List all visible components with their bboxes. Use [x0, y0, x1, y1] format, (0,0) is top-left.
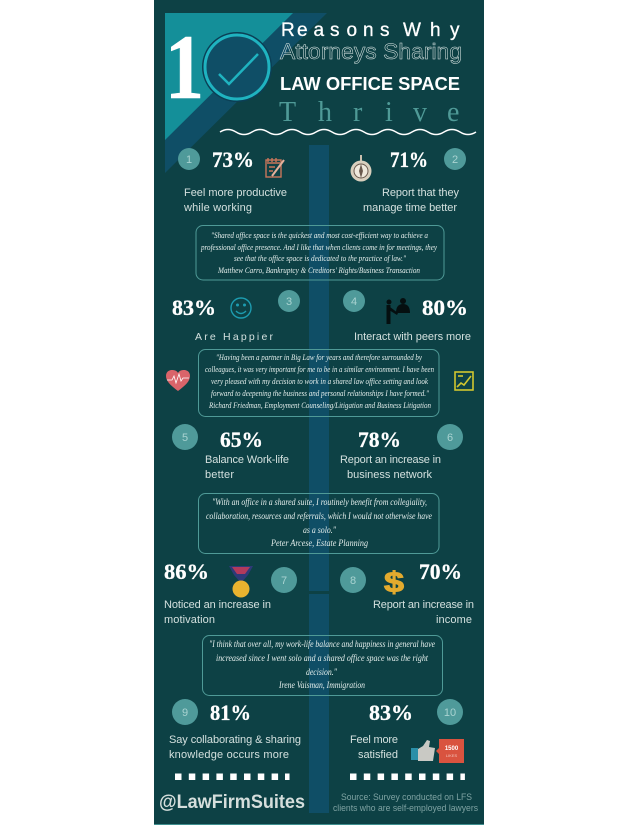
quote 2: [198, 350, 439, 416]
handle: @LawFirmSuites: [159, 792, 305, 813]
stat 8: 70% income: [340, 559, 474, 626]
stat 2: 71% time: 71%: [390, 147, 428, 172]
quote 2: very pleased with my decision to work in a shared law office setting and look: [211, 376, 428, 386]
icon: compass: [350, 155, 372, 182]
stat 8: 70% income: 70%: [419, 559, 462, 584]
stat 5: 65% balance: better: [205, 469, 234, 481]
stat 7: 86% motivation: [164, 559, 297, 626]
stat 7: 86% motivation: 86%: [164, 559, 209, 584]
stat 9: 81% collaborating: Say collaborating & sharing: [169, 734, 301, 746]
stat 9: 81% collaborating: 9: [182, 707, 188, 719]
stat 8: 70% income: Report an increase in: [373, 599, 474, 611]
quote 4: increased since I went solo and a shared office space was the right: [216, 653, 428, 664]
icon: 1500 likes badge: [436, 739, 464, 763]
stat 10: 83% satisfied: 10: [444, 707, 456, 719]
title: LAW OFFICE SPACE: [280, 74, 460, 94]
stat 10: 83% satisfied: 83%: [369, 700, 413, 725]
source note: clients who are self-employed lawyers: [333, 803, 478, 814]
stat 7: 86% motivation: 7: [281, 575, 287, 587]
stat 2: 71% time: [363, 147, 466, 214]
stat 6: 78% network: Report an increase in: [340, 454, 441, 466]
icon: growth chart: [455, 372, 473, 390]
stat 6: 78% network: [340, 424, 463, 481]
stat 4: 80% peers: 80%: [422, 295, 468, 320]
big numeral and check badge: [165, 16, 272, 118]
stat 5: 65% balance: 5: [182, 432, 188, 444]
source note: [333, 792, 478, 814]
stat 9: 81% collaborating: 81%: [210, 700, 251, 725]
stat 3: 83% happier: Are Happier: [195, 331, 274, 343]
big numeral and check badge: 1: [165, 16, 204, 118]
quote 1: professional office presence. And I like that when clients come in for meetings, they: [200, 242, 437, 252]
square dots right: [350, 774, 465, 780]
quote 3: [198, 494, 439, 554]
title: Reasons Why: [281, 20, 460, 41]
stat 9: 81% collaborating: [169, 699, 301, 761]
source note: Source: Survey conducted on LFS: [341, 792, 472, 803]
wave divider: [220, 130, 476, 134]
quote 4: Irene Vaisman, Immigration: [278, 681, 365, 691]
stat 4: 80% peers: 4: [351, 296, 357, 308]
stat 6: 78% network: business network: [347, 469, 432, 481]
stat 2: 71% time: Report that they: [382, 187, 460, 199]
icon: smiley: [231, 298, 251, 318]
stat 8: 70% income: income: [436, 614, 472, 626]
stat 4: 80% peers: [343, 290, 471, 343]
icon: 1500 likes badge: 1500: [445, 746, 459, 752]
quote 2: forward to deepening the business and personal relationships I have formed.": [211, 388, 429, 398]
stat 3: 83% happier: [172, 290, 300, 343]
quote 3: as a solo.": [303, 526, 337, 536]
stat 1: 73% productive: 73%: [212, 147, 254, 172]
stat 6: 78% network: 78%: [358, 427, 401, 452]
quote 3: Peter Arcese, Estate Planning: [270, 539, 368, 549]
title: Attorneys Sharing: [280, 39, 462, 64]
quote 2: Richard Friedman, Employment Counseling/Litigation and Business Litigation: [208, 400, 431, 410]
stat 3: 83% happier: 3: [286, 296, 292, 308]
stat 10: 83% satisfied: satisfied: [358, 749, 398, 761]
icon: dollar sign: $: [384, 567, 404, 599]
stat 9: 81% collaborating: knowledge occurs more: [169, 749, 289, 761]
stat 1: 73% productive: [178, 147, 287, 214]
panel: infographic background: [154, 0, 484, 825]
quote 4: "I think that over all, my work-life balance and happiness in general have: [209, 639, 435, 650]
bottom edge line: [154, 824, 484, 825]
stat 5: 65% balance: Balance Work-life: [205, 454, 289, 466]
icon: 1500 likes badge: LIKES: [446, 753, 458, 758]
stat 5: 65% balance: [172, 424, 289, 481]
stat 3: 83% happier: 83%: [172, 295, 216, 320]
stat 6: 78% network: 6: [447, 432, 453, 444]
quote 3: "With an office in a shared suite, I routinely benefit from collegiality,: [212, 497, 427, 508]
title: [279, 20, 462, 128]
quote 4: [202, 636, 442, 696]
quote 4: decision.": [306, 668, 338, 678]
stat 1: 73% productive: 1: [186, 154, 192, 166]
quote 1: Matthew Carro, Bankruptcy & Creditors' Rights/Business Transaction: [217, 265, 420, 275]
icon: heart with pulse: [166, 370, 190, 391]
quote 1: [196, 226, 444, 280]
stat 7: 86% motivation: Noticed an increase in: [164, 599, 271, 611]
square dots left: [175, 774, 290, 780]
quote 3: collaboration, resources and referrals, which I would not otherwise have: [206, 511, 432, 522]
stat 8: 70% income: 8: [350, 575, 356, 587]
stat 10: 83% satisfied: [350, 699, 463, 761]
stat 2: 71% time: manage time better: [363, 202, 457, 214]
icon: people meeting: [386, 298, 410, 324]
icon: notepad: [266, 158, 284, 177]
central vertical band: [309, 145, 329, 813]
stat 1: 73% productive: Feel more productive: [184, 187, 287, 199]
stat 4: 80% peers: Interact with peers more: [354, 331, 471, 343]
header triangle graphic: [165, 13, 327, 173]
quote 2: colleagues, it was very important for me to be in a similar environment. I have been: [205, 364, 434, 374]
icon: medal: [229, 566, 253, 598]
stat 5: 65% balance: 65%: [220, 427, 263, 452]
stat 7: 86% motivation: motivation: [164, 614, 215, 626]
quote 1: "Shared office space is the quickest and most cost-efficient way to achieve a: [211, 230, 428, 240]
title: Thrive: [279, 97, 459, 128]
quote 1: see that the office space is dedicated to the practice of law.": [234, 253, 406, 263]
stat 2: 71% time: 2: [452, 154, 458, 166]
stat 10: 83% satisfied: Feel more: [350, 734, 398, 746]
icon: thumbs up: [411, 740, 435, 761]
stat 1: 73% productive: while working: [183, 202, 252, 214]
quote 2: "Having been a partner in Big Law for years and therefore surrounded by: [216, 352, 422, 362]
